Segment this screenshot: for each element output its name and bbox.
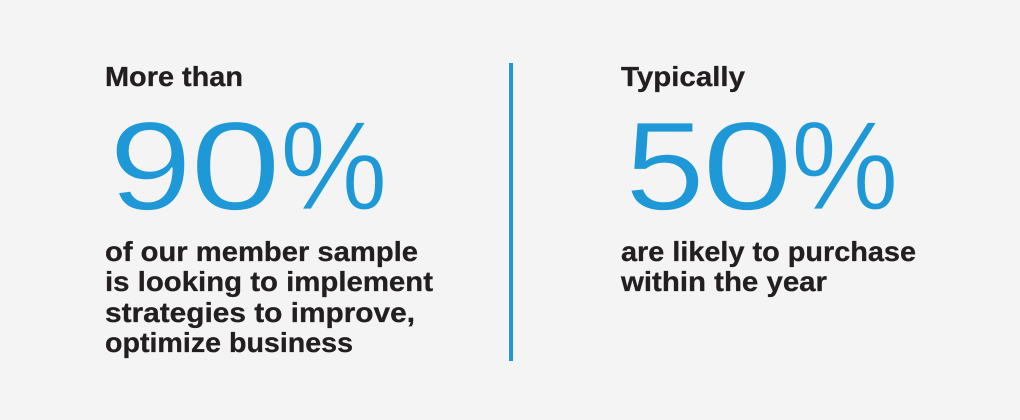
text block: member sample description: strategies to improve,: [105, 297, 415, 328]
big number: 50%: [625, 96, 899, 237]
big number: 90%: 9: [109, 96, 192, 237]
text block: member sample description: of our member sample: [105, 236, 418, 267]
big number: 50%: %: [791, 96, 899, 237]
big number: 50%: 5: [625, 96, 705, 237]
heading: More than: More than: [105, 61, 243, 92]
text block: member sample description: is looking to implement: [105, 266, 433, 297]
text block: member sample description: [105, 236, 433, 358]
text block: member sample description: optimize business: [105, 327, 353, 358]
panel: left statistic: [105, 61, 433, 358]
text block: purchase description: [620, 236, 916, 297]
heading: Typically: Typically: [621, 61, 745, 92]
big number: 90%: %: [280, 96, 388, 237]
text block: purchase description: within the year: [620, 266, 827, 297]
big number: 50%: 0: [702, 96, 793, 236]
big number: 90%: [109, 96, 388, 237]
text block: purchase description: are likely to purchase: [621, 236, 916, 267]
big number: 90%: 0: [190, 96, 281, 236]
panel: right statistic: [620, 61, 916, 297]
vertical divider: [509, 63, 513, 361]
